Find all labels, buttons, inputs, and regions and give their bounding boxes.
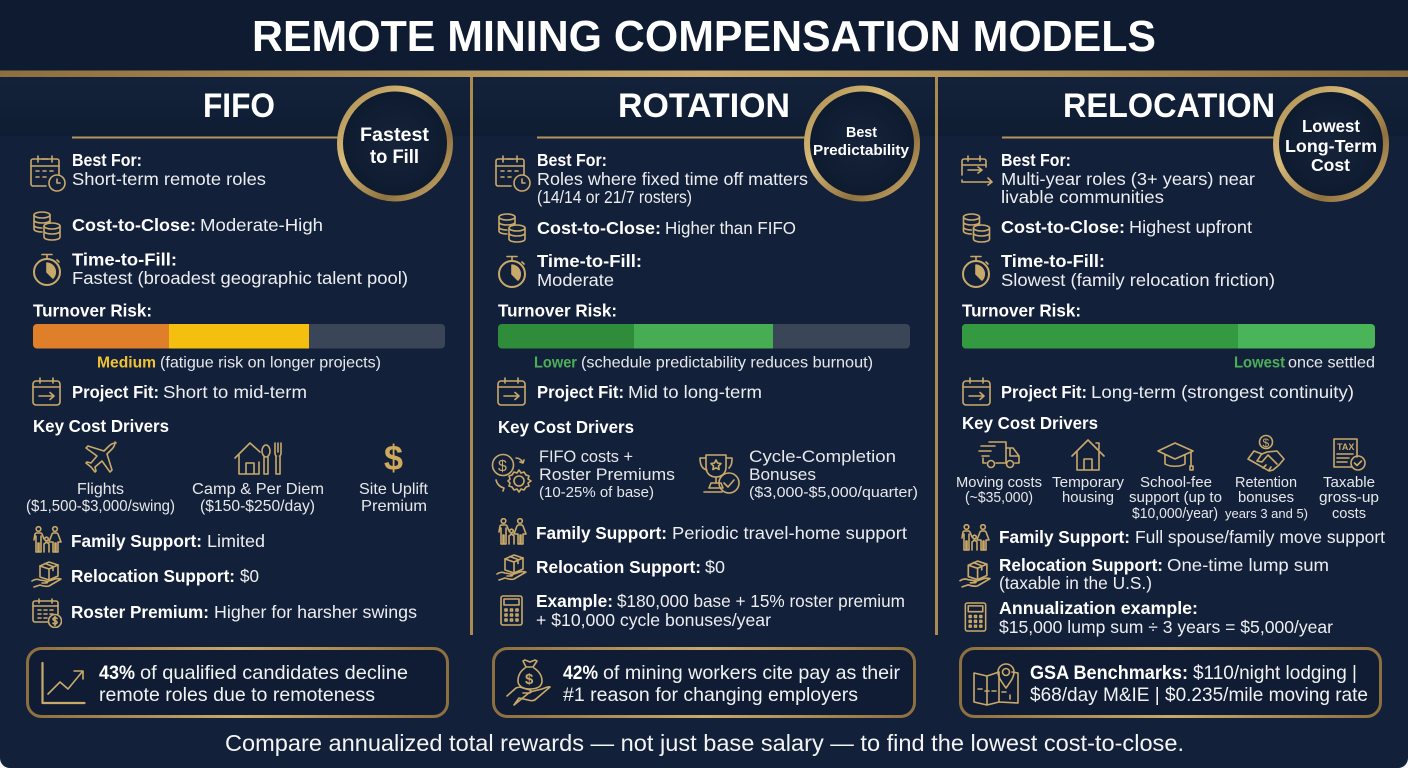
- example: [536, 591, 905, 630]
- turnover note: Lower: [534, 354, 577, 372]
- key cost drivers heading: Key Cost Drivers: [498, 417, 634, 437]
- driver: camp and per diem: ($150-$250/day): [200, 498, 315, 515]
- callout: pay stat: of mining workers cite pay as their: [603, 662, 900, 684]
- time to fill: Slowest (family relocation friction): [1001, 270, 1275, 290]
- cost to close: Cost-to-Close:: [1001, 217, 1125, 237]
- family support: [536, 523, 907, 543]
- turnover risk label: Turnover Risk:: [498, 300, 617, 320]
- icon: plane: [86, 442, 116, 472]
- driver: retention bonuses: bonuses: [1238, 490, 1294, 506]
- driver: flights: ($1,500-$3,000/swing): [26, 498, 175, 515]
- icon: tax form: TAX: [1337, 442, 1354, 452]
- icon: calendar dollar: [33, 599, 62, 628]
- project fit: Mid to long-term: [628, 382, 762, 402]
- driver: roster premiums: (10-25% of base): [539, 485, 654, 501]
- cost to close: Cost-to-Close:: [537, 218, 661, 238]
- project fit: Long-term (strongest continuity): [1091, 382, 1354, 402]
- best for: Multi-year roles (3+ years) near: [1001, 169, 1255, 189]
- example: + $10,000 cycle bonuses/year: [536, 610, 771, 630]
- icon: family: [499, 519, 526, 544]
- relocation support: $0: [240, 566, 259, 586]
- relocation badge: Lowest: [1302, 116, 1360, 136]
- cost to close: [537, 218, 796, 238]
- callout: decline stat: of qualified candidates decline: [140, 662, 408, 684]
- driver: temporary housing: [1052, 440, 1125, 506]
- icon: family: [962, 525, 989, 550]
- driver: retention bonuses: [1225, 436, 1308, 521]
- cost to close: Moderate-High: [200, 215, 323, 235]
- icon: trophy: [700, 455, 739, 493]
- icon: coins: [34, 212, 60, 240]
- driver: site uplift: [359, 439, 429, 515]
- driver: cycle completion bonuses: ($3,000-$5,000/quarter): [749, 485, 918, 501]
- key cost drivers heading: Key Cost Drivers: [33, 416, 169, 436]
- project fit: Project Fit:: [1001, 382, 1087, 402]
- driver: moving costs: Moving costs: [956, 475, 1042, 491]
- icon: stopwatch: [499, 256, 525, 287]
- project fit: Short to mid-term: [163, 382, 307, 402]
- family support: [999, 527, 1385, 547]
- FIFO badge: to Fill: [370, 146, 419, 168]
- best for: (14/14 or 21/7 rosters): [537, 187, 692, 207]
- callout: GSA benchmarks: $68/day M&IE | $0.235/mile moving rate: [1030, 684, 1368, 706]
- driver: retention bonuses: Retention: [1235, 475, 1297, 491]
- cost to close: Higher than FIFO: [665, 218, 796, 238]
- icon: calendar clock: [496, 156, 530, 191]
- driver: cycle completion bonuses: Cycle-Completion: [749, 447, 896, 466]
- time to fill: Time-to-Fill:: [537, 251, 642, 271]
- callout: GSA benchmarks: $110/night lodging |: [1193, 662, 1357, 684]
- rotation badge: Predictability: [813, 143, 909, 159]
- callout: decline stat: 43%: [99, 662, 135, 684]
- annualization example: [999, 598, 1333, 637]
- icon: calculator: [965, 603, 986, 631]
- turnover note: (schedule predictability reduces burnout): [581, 354, 873, 372]
- rotation rule: [537, 136, 807, 138]
- rotation badge: Best: [846, 125, 877, 141]
- column divider right: [935, 77, 938, 635]
- panel: Rotation: [492, 87, 918, 716]
- relocation support: Relocation Support:: [536, 557, 701, 577]
- best for: Roles where fixed time off matters: [537, 169, 808, 189]
- callout: GSA benchmarks: GSA Benchmarks:: [1030, 662, 1188, 684]
- driver: moving costs: (~$35,000): [965, 490, 1033, 506]
- callout: pay stat: #1 reason for changing employers: [563, 684, 858, 706]
- driver: taxable gross-up: costs: [1332, 506, 1366, 522]
- driver: temporary housing: Temporary: [1052, 475, 1125, 491]
- icon: house: [1072, 440, 1104, 470]
- time to fill: [537, 251, 642, 290]
- example: $180,000 base + 15% roster premium: [617, 591, 905, 611]
- project fit: Project Fit:: [72, 382, 159, 402]
- driver: cycle completion bonuses: Bonuses: [749, 465, 816, 484]
- roster premium: Higher for harsher swings: [214, 602, 417, 622]
- relocation support: $0: [705, 557, 725, 577]
- family support: [71, 531, 265, 551]
- icon: project fit: [498, 378, 525, 405]
- driver: roster premiums: FIFO costs +: [539, 447, 633, 466]
- icon: handshake with dollar: $: [1262, 436, 1270, 450]
- relocation support: One-time lump sum: [1167, 555, 1329, 575]
- driver: roster premiums: [492, 447, 675, 501]
- time to fill: Moderate: [537, 270, 614, 290]
- relocation support: Relocation Support:: [71, 566, 235, 586]
- best for: Best For:: [1001, 150, 1071, 170]
- column divider left: [470, 77, 473, 635]
- project fit: [1001, 382, 1354, 402]
- cost to close: Cost-to-Close:: [72, 215, 196, 235]
- time to fill: [72, 250, 408, 288]
- project fit: [72, 382, 307, 402]
- icon: box in hand: [32, 562, 61, 587]
- relocation badge: Cost: [1311, 155, 1350, 175]
- driver: site uplift: Premium: [361, 498, 427, 515]
- driver: taxable gross-up: [1319, 439, 1379, 522]
- best for: [72, 150, 266, 189]
- example: Example:: [536, 591, 613, 611]
- turnover note: [1234, 354, 1375, 372]
- callout: pay stat: [494, 648, 914, 716]
- turnover risk label: Turnover Risk:: [962, 300, 1081, 320]
- rotation heading: ROTATION: [618, 87, 790, 125]
- annualization example: $15,000 lump sum ÷ 3 years = $5,000/year: [999, 617, 1333, 637]
- icon: calendar clock: [31, 156, 65, 191]
- driver: retention bonuses: years 3 and 5): [1225, 506, 1308, 521]
- time to fill: Time-to-Fill:: [1001, 251, 1105, 271]
- time to fill: Time-to-Fill:: [72, 250, 177, 270]
- family support: Family Support:: [536, 523, 667, 543]
- gold header rule: [0, 70, 1408, 77]
- FIFO badge: [340, 88, 450, 198]
- driver: temporary housing: housing: [1062, 490, 1114, 506]
- turnover note: once settled: [1288, 354, 1375, 372]
- driver: school fee support: support (up to: [1129, 490, 1222, 506]
- relocation support: [999, 555, 1329, 593]
- icon: truck: [979, 442, 1019, 468]
- callout: GSA benchmarks: [960, 648, 1380, 716]
- driver: school fee support: $10,000/year): [1132, 506, 1218, 522]
- family support: Family Support:: [999, 527, 1130, 547]
- icon: graduation cap: [1158, 443, 1193, 470]
- best for: livable communities: [1001, 187, 1164, 207]
- panel: Relocation: [956, 87, 1386, 716]
- family support: Family Support:: [71, 531, 202, 551]
- callout: decline stat: remote roles due to remoteness: [99, 684, 375, 706]
- project fit: Project Fit:: [537, 382, 624, 402]
- icon: dollar and gear: [492, 454, 531, 492]
- driver: roster premiums: Roster Premiums: [539, 465, 675, 484]
- turnover note: (fatigue risk on longer projects): [160, 354, 381, 372]
- icon: calculator: [501, 596, 522, 625]
- icon: box in hand: [960, 561, 990, 587]
- time to fill: [1001, 251, 1275, 290]
- icon: stopwatch: [963, 256, 989, 287]
- icon: coins: [499, 214, 525, 242]
- driver: school fee support: School-fee: [1140, 475, 1212, 491]
- icon: stopwatch: [34, 254, 60, 285]
- turnover note: Lowest: [1234, 354, 1286, 372]
- relocation heading: RELOCATION: [1063, 87, 1275, 125]
- roster premium: [71, 602, 417, 622]
- driver: camp and per diem: Camp & Per Diem: [192, 481, 324, 498]
- callout: pay stat: 42%: [563, 662, 598, 684]
- relocation badge: [1276, 89, 1386, 199]
- best for: [1001, 150, 1255, 207]
- turnover note: Medium: [97, 354, 156, 372]
- family support: Periodic travel-home support: [672, 523, 907, 543]
- driver: taxable gross-up: Taxable: [1323, 475, 1375, 491]
- best for: Best For:: [72, 150, 142, 170]
- best for: Best For:: [537, 150, 607, 170]
- driver: site uplift: Site Uplift: [359, 481, 429, 498]
- driver: cycle completion bonuses: [700, 447, 918, 501]
- driver: moving costs: [956, 442, 1042, 506]
- turnover risk bar: [33, 324, 445, 348]
- roster premium: Roster Premium:: [71, 602, 209, 622]
- icon: map pin: [974, 664, 1018, 705]
- icon: chart: [42, 663, 84, 703]
- footer takeaway: Compare annualized total rewards — not just base salary — to find the lowest cost-to-close.: [225, 730, 1184, 756]
- annualization example: Annualization example:: [999, 598, 1198, 618]
- turnover risk bar: [962, 324, 1375, 348]
- family support: Full spouse/family move support: [1135, 527, 1385, 547]
- icon: dollar: $: [384, 439, 403, 478]
- cost to close: [1001, 217, 1252, 237]
- cost to close: Highest upfront: [1129, 217, 1252, 237]
- rotation badge: [807, 88, 917, 198]
- icon: calendar move: [962, 156, 992, 185]
- key cost drivers heading: Key Cost Drivers: [962, 413, 1098, 433]
- driver: camp and per diem: [192, 443, 324, 515]
- icon: project fit: [33, 378, 60, 405]
- FIFO rule: [72, 136, 340, 138]
- title: REMOTE MINING COMPENSATION MODELS: [252, 12, 1156, 61]
- best for: Short-term remote roles: [72, 169, 266, 189]
- relocation support: Relocation Support:: [999, 555, 1163, 575]
- icon: coins: [964, 214, 990, 242]
- icon: box in hand: [497, 555, 526, 580]
- icon: money bag in hand: $: [525, 671, 534, 688]
- FIFO badge: Fastest: [360, 124, 430, 146]
- turnover risk label: Turnover Risk:: [33, 300, 152, 320]
- project fit: [537, 382, 762, 402]
- icon: project fit: [963, 378, 990, 405]
- icon: dollar and gear: $: [498, 458, 507, 475]
- relocation badge: Long-Term: [1285, 136, 1377, 156]
- driver: taxable gross-up: gross-up: [1319, 490, 1379, 506]
- FIFO heading: FIFO: [203, 87, 275, 125]
- icon: house and cutlery: [235, 443, 281, 474]
- family support: Limited: [207, 531, 265, 551]
- panel: FIFO: [26, 87, 450, 716]
- relocation rule: [1002, 136, 1275, 138]
- relocation support: (taxable in the U.S.): [999, 573, 1152, 593]
- best for: [537, 150, 808, 207]
- driver: flights: [26, 442, 175, 515]
- driver: flights: Flights: [77, 481, 124, 498]
- callout: decline stat: [28, 648, 448, 716]
- time to fill: Fastest (broadest geographic talent pool): [72, 268, 408, 288]
- cost to close: [72, 215, 323, 235]
- icon: family: [34, 527, 61, 552]
- icon: money bag in hand: [507, 660, 550, 705]
- driver: school fee support: [1129, 443, 1222, 522]
- turnover risk bar: [498, 324, 910, 348]
